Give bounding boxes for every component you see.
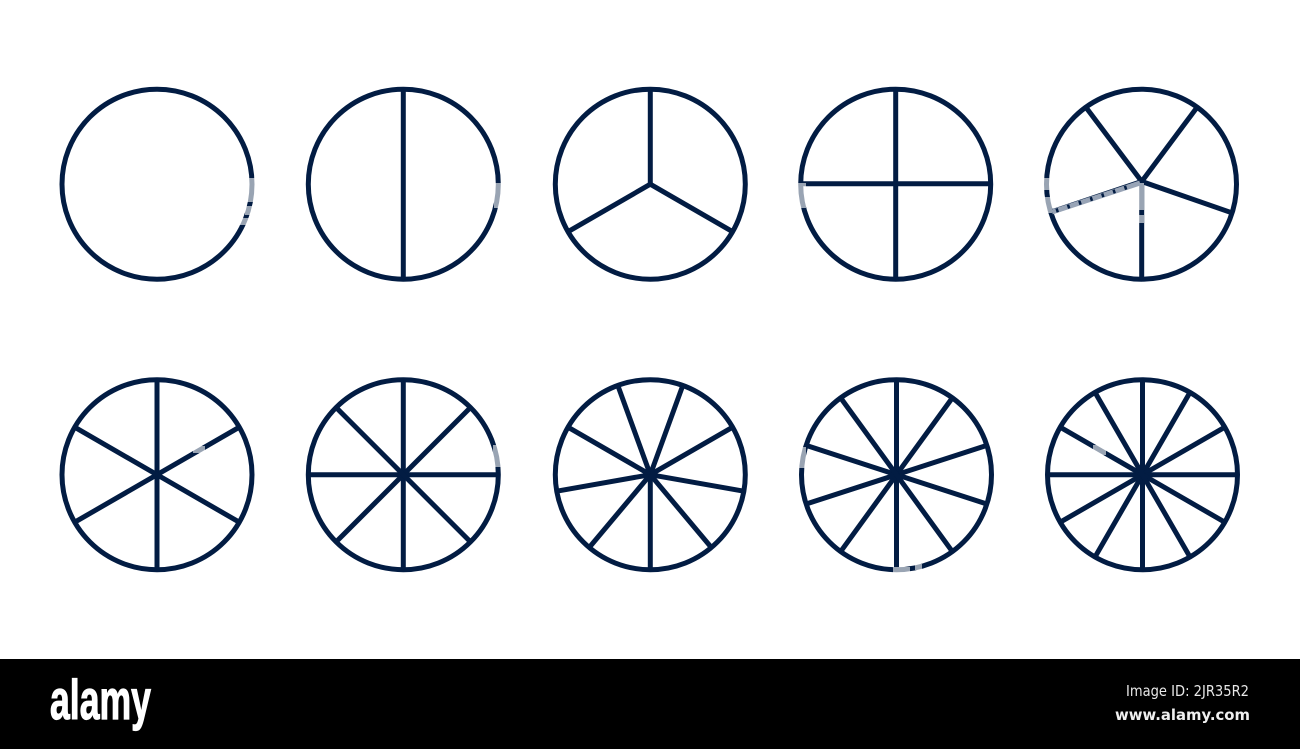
circle: 2 segments bbox=[308, 89, 498, 279]
logo wordmark: alamy bbox=[50, 668, 151, 731]
circle: 9 segments bbox=[555, 380, 745, 570]
faded watermark patches over the line work bbox=[193, 178, 1144, 573]
circle: 10 segments bbox=[802, 380, 992, 570]
circle: 5 segments bbox=[1046, 89, 1236, 279]
footer bar bbox=[0, 659, 1300, 749]
circle: 3 segments bbox=[555, 89, 745, 279]
circle: 8 segments bbox=[308, 380, 498, 570]
circle: undivided bbox=[62, 89, 252, 279]
circle: 6 segments bbox=[62, 380, 252, 570]
circle: 12 segments bbox=[1048, 380, 1238, 570]
circle: 4 segments bbox=[801, 89, 991, 279]
faded left spoke of the 5 segment circle bbox=[1052, 183, 1140, 212]
website: www.alamy.com bbox=[1115, 706, 1250, 724]
image id: Image ID: 2JR35R2 bbox=[1126, 682, 1249, 700]
